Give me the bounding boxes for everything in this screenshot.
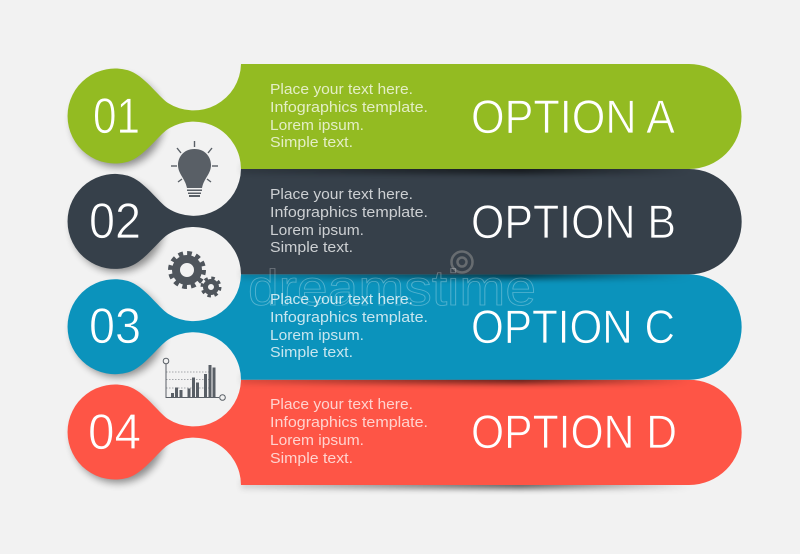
heading: option A: OPTION A (471, 90, 676, 143)
heading: option C: OPTION C (471, 300, 675, 353)
number 03: 03 (89, 298, 141, 354)
icon: gears (170, 254, 220, 296)
panel: option B (68, 169, 742, 279)
number 04: 04 (88, 404, 141, 460)
text block: option A (270, 81, 428, 151)
heading: option D: OPTION D (471, 405, 677, 458)
icon: bar chart (163, 358, 225, 400)
text block: option D: Lorem ipsum. (270, 432, 364, 449)
text block: option D (270, 396, 428, 467)
text block: option A: Infographics template. (270, 99, 428, 116)
number 02: 02 (89, 193, 141, 249)
text block: option B: Simple text. (270, 239, 353, 256)
text block: option C: Place your text here. (270, 291, 413, 308)
text block: option A: Simple text. (270, 134, 353, 151)
text block: option B: Lorem ipsum. (270, 222, 364, 239)
text block: option A: Place your text here. (270, 81, 413, 98)
watermark: dreamstime (248, 260, 536, 316)
number 01: 01 (93, 88, 140, 144)
panel: option C (68, 274, 742, 384)
text block: option A: Lorem ipsum. (270, 117, 364, 134)
text block: option B (270, 186, 428, 256)
panel: option A (68, 64, 741, 174)
text block: option D: Place your text here. (270, 396, 413, 413)
panel: option D (68, 380, 742, 489)
text block: option C: Lorem ipsum. (270, 327, 364, 344)
text block: option B: Infographics template. (270, 204, 428, 221)
heading: option B: OPTION B (471, 195, 676, 248)
text block: option C (270, 291, 428, 361)
text block: option B: Place your text here. (270, 186, 413, 203)
text block: option D: Infographics template. (270, 414, 428, 431)
text block: option D: Simple text. (270, 450, 353, 467)
text block: option C: Infographics template. (270, 309, 428, 326)
text block: option C: Simple text. (270, 344, 353, 361)
icon: light bulb (171, 141, 218, 197)
